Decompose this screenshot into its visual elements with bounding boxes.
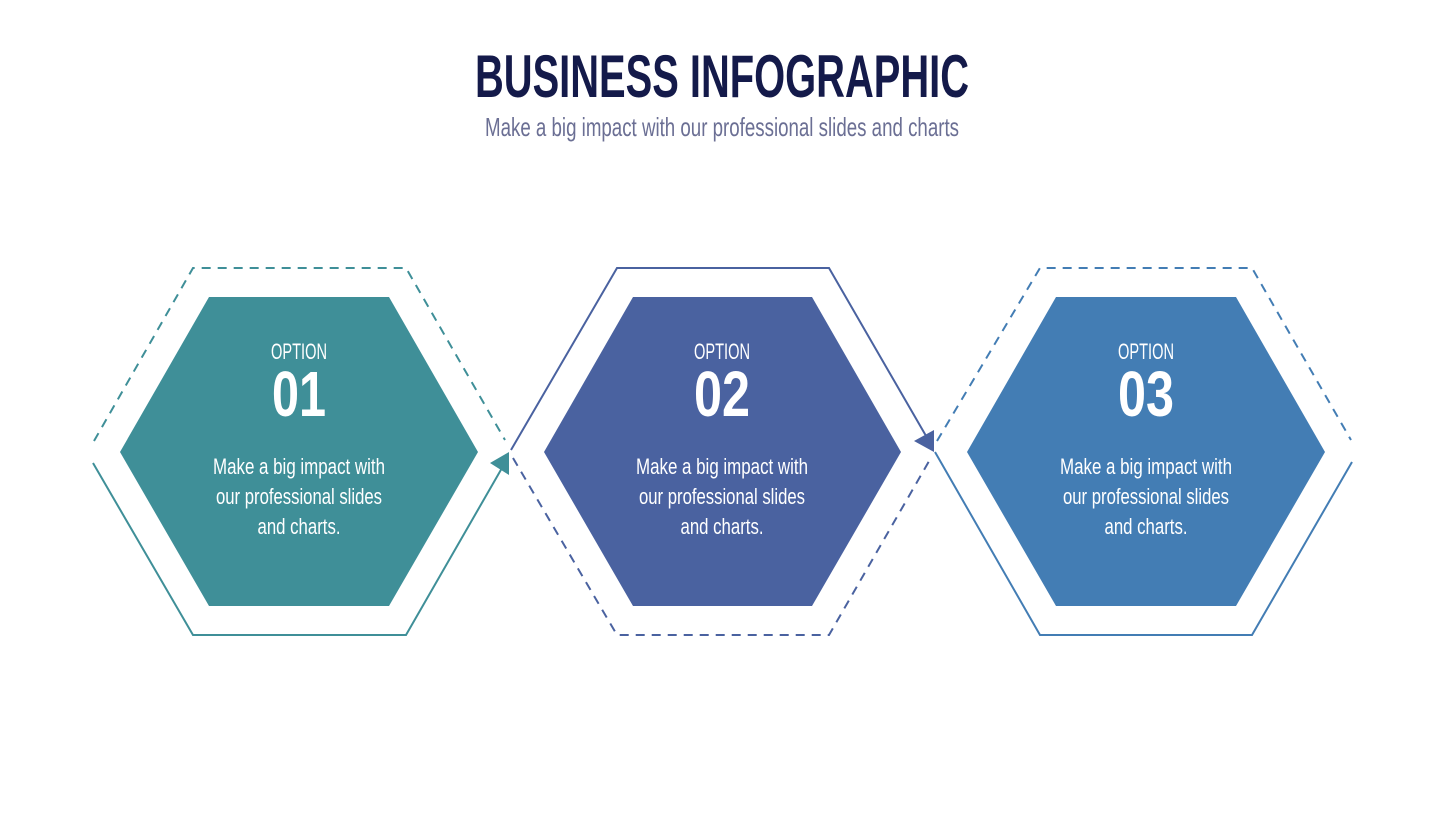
- label option: OPTION: [1118, 339, 1174, 364]
- label option: OPTION: [271, 339, 327, 364]
- number: 01: [272, 358, 326, 430]
- number: 03: [1118, 358, 1174, 430]
- hexagon fill: [967, 297, 1325, 606]
- body text: [636, 454, 808, 539]
- body text: Make a big impact with: [213, 454, 385, 479]
- outline dashed top: [937, 268, 1351, 441]
- body text: [1060, 454, 1232, 539]
- panel: option 02: [511, 268, 934, 635]
- body text: our professional slides: [639, 484, 805, 509]
- body text: Make a big impact with: [636, 454, 808, 479]
- body text: Make a big impact with: [1060, 454, 1232, 479]
- hexagon fill: [544, 297, 901, 606]
- outline dashed top: [94, 268, 505, 441]
- body text: and charts.: [258, 514, 340, 539]
- arrow: teal: [490, 452, 509, 475]
- panel: option 03: [935, 268, 1352, 635]
- body text: our professional slides: [1063, 484, 1229, 509]
- body text: [213, 454, 385, 539]
- panel: option 01: [93, 268, 509, 635]
- body text: our professional slides: [216, 484, 382, 509]
- body text: and charts.: [1104, 514, 1188, 539]
- arrow: indigo: [914, 430, 934, 452]
- number: 02: [694, 358, 750, 430]
- label option: OPTION: [694, 339, 750, 364]
- body text: and charts.: [680, 514, 764, 539]
- outline solid top: [511, 268, 933, 450]
- outline dashed bottom: [513, 456, 932, 635]
- subtitle: Make a big impact with our professional slides and charts: [485, 112, 959, 142]
- hexagon fill: [120, 297, 478, 606]
- outline solid bottom: [93, 461, 506, 635]
- outline solid bottom: [935, 452, 1352, 635]
- title: BUSINESS INFOGRAPHIC: [475, 43, 969, 110]
